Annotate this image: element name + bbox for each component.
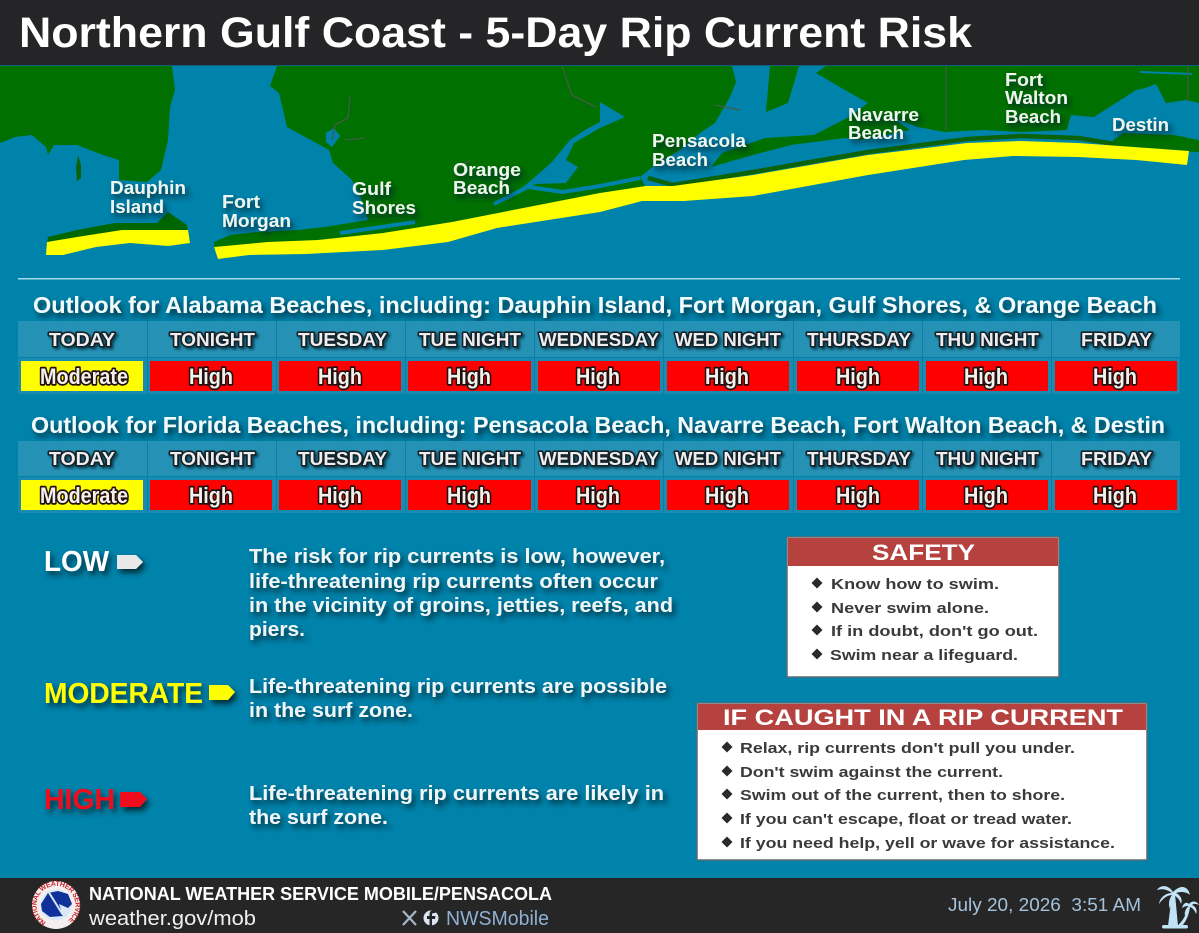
risk values: High [447, 483, 491, 508]
map place labels: Destin [1112, 115, 1169, 135]
rip current list: Swim out of the current, then to shore. [740, 788, 1065, 804]
day headers: THURSDAY [807, 449, 911, 469]
risk values: High [836, 364, 880, 389]
day headers [49, 330, 1152, 350]
water: back bays [340, 178, 640, 233]
yellow risk band: Dauphin Island [46, 230, 190, 255]
map place labels: Pensacola [652, 131, 747, 151]
icon: NWS seal: NATIONAL WEATHER SERVICE [32, 880, 80, 926]
legend: high risk: HIGH [44, 784, 115, 816]
safety list: Swim near a lifeguard. [830, 648, 1018, 664]
safety list [812, 577, 1038, 664]
map place labels: Gulf [352, 179, 392, 199]
date and time: July 20, 2026 3:51 AM [948, 895, 1141, 915]
map place labels: Walton [1005, 88, 1068, 108]
title: Northern Gulf Coast - 5-Day Rip Current Risk [19, 9, 972, 57]
legend: moderate risk: MODERATE [44, 678, 203, 710]
map place labels: Dauphin [110, 178, 186, 198]
description: low risk: The risk for rip currents is low, however, [249, 546, 665, 568]
day headers: THU NIGHT [936, 449, 1039, 469]
icon: palm trees [1157, 886, 1199, 928]
yellow risk band: Fort Morgan to Destin [214, 141, 1189, 259]
map place labels: Fort [1005, 70, 1043, 90]
panel: safety [787, 537, 1059, 677]
map place labels: Navarre [848, 105, 919, 125]
map place labels: Orange [453, 160, 521, 180]
map place labels: Beach [453, 178, 510, 198]
panel: if caught in a rip current [697, 703, 1147, 860]
rip current heading: IF CAUGHT IN A RIP CURRENT [723, 705, 1124, 730]
water: Choctawhatchee inlet [1140, 72, 1192, 74]
land: Dauphin Island [47, 212, 188, 244]
icon: Facebook logo [424, 910, 438, 926]
title bar [0, 0, 1199, 66]
risk values: High [964, 483, 1008, 508]
description: moderate risk: Life-threatening rip currents are possible [249, 676, 667, 698]
risk values [21, 361, 1177, 391]
safety list: If in doubt, don't go out. [831, 624, 1038, 640]
day headers: WEDNESDAY [539, 449, 659, 469]
risk values: High [318, 483, 362, 508]
risk values: High [447, 364, 491, 389]
risk values: High [705, 483, 749, 508]
description: low risk: piers. [249, 619, 305, 641]
barrier island Santa Rosa [648, 136, 1115, 185]
map place labels: Beach [652, 150, 708, 170]
legend: low risk [44, 546, 143, 578]
day headers: WED NIGHT [675, 330, 781, 350]
rivers and county lines [332, 66, 1188, 170]
description: low risk: life-threatening rip currents often occur [249, 571, 658, 593]
description: moderate risk: in the surf zone. [249, 700, 413, 722]
land: Bayou La Batre island [76, 155, 81, 181]
office name: NATIONAL WEATHER SERVICE MOBILE/PENSACOLA [89, 883, 552, 904]
heading: Florida outlook: Outlook for Florida Beaches, including: Pensacola Beach, Navarre Beach, Fort Walton Beach, & Destin [31, 412, 1165, 438]
land: west of Mobile Bay [0, 66, 175, 182]
land: Destin [1113, 133, 1199, 152]
land: Baldwin and Escambia coast [214, 66, 736, 249]
risk values: High [964, 364, 1008, 389]
description: low risk [249, 546, 673, 641]
map place labels: Beach [848, 123, 904, 143]
map place labels: Island [110, 197, 164, 217]
rip current list [722, 741, 1115, 852]
footer bar [0, 878, 1199, 933]
description: moderate risk [249, 676, 667, 722]
day headers: THURSDAY [807, 330, 911, 350]
risk values: Moderate [40, 483, 128, 508]
water: Perdido and Escambia bays [513, 102, 625, 194]
day headers: TUESDAY [298, 330, 387, 350]
risk values: Moderate [40, 364, 128, 389]
map place labels: Morgan [222, 211, 291, 231]
description: high risk: the surf zone. [249, 807, 388, 829]
legend: low risk: LOW [44, 546, 110, 578]
land: Gulf Breeze peninsula [711, 103, 910, 167]
risk values: High [836, 483, 880, 508]
day headers: THU NIGHT [936, 330, 1039, 350]
land: Santa Rosa, Okaloosa and Walton coast [816, 66, 1199, 132]
rip current list: If you can't escape, float or tread water. [740, 812, 1072, 828]
water: Gulf Shores lagoon [326, 128, 340, 147]
map place labels [110, 70, 1169, 231]
risk values: High [576, 483, 620, 508]
rip current list: Relax, rip currents don't pull you under. [740, 741, 1075, 757]
risk values: High [705, 364, 749, 389]
land: Blackwater peninsula [766, 66, 799, 112]
risk values [21, 480, 1177, 510]
map place labels: Shores [352, 198, 416, 218]
description: high risk [249, 783, 664, 829]
day headers: TONIGHT [170, 330, 255, 350]
map of the northern Gulf Coast [0, 66, 1199, 259]
risk values: High [189, 483, 233, 508]
risk values: High [1093, 483, 1137, 508]
safety heading: SAFETY [872, 540, 975, 565]
day headers: TUE NIGHT [419, 330, 521, 350]
social handle: NWSMobile [446, 908, 549, 930]
day headers: TUE NIGHT [419, 449, 521, 469]
rip current list: Don't swim against the current. [740, 765, 1003, 781]
day headers [49, 449, 1152, 469]
description: high risk: Life-threatening rip currents are likely in [249, 783, 664, 805]
day headers: TODAY [49, 330, 115, 350]
table: Florida outlook [18, 441, 1180, 513]
day headers: TODAY [49, 449, 115, 469]
icon: X logo [403, 911, 416, 925]
risk values: High [1093, 364, 1137, 389]
map place labels: Fort [222, 192, 260, 212]
day headers: TONIGHT [170, 449, 255, 469]
day headers: TUESDAY [298, 449, 387, 469]
day headers: FRIDAY [1081, 449, 1152, 469]
day headers: WEDNESDAY [539, 330, 659, 350]
table: Alabama outlook [18, 321, 1180, 394]
risk values: High [318, 364, 362, 389]
rip current list: If you need help, yell or wave for assistance. [740, 836, 1115, 852]
day headers: FRIDAY [1081, 330, 1152, 350]
risk values: High [576, 364, 620, 389]
map place labels: Beach [1005, 107, 1061, 127]
risk values: High [189, 364, 233, 389]
description: low risk: in the vicinity of groins, jetties, reefs, and [249, 595, 673, 617]
safety list: Know how to swim. [831, 577, 999, 593]
website: weather.gov/mob [88, 908, 256, 930]
safety list: Never swim alone. [831, 601, 989, 617]
heading: Alabama outlook: Outlook for Alabama Beaches, including: Dauphin Island, Fort Morgan, Gulf Shores, & Orange Beach [33, 292, 1157, 318]
day headers: WED NIGHT [675, 449, 781, 469]
